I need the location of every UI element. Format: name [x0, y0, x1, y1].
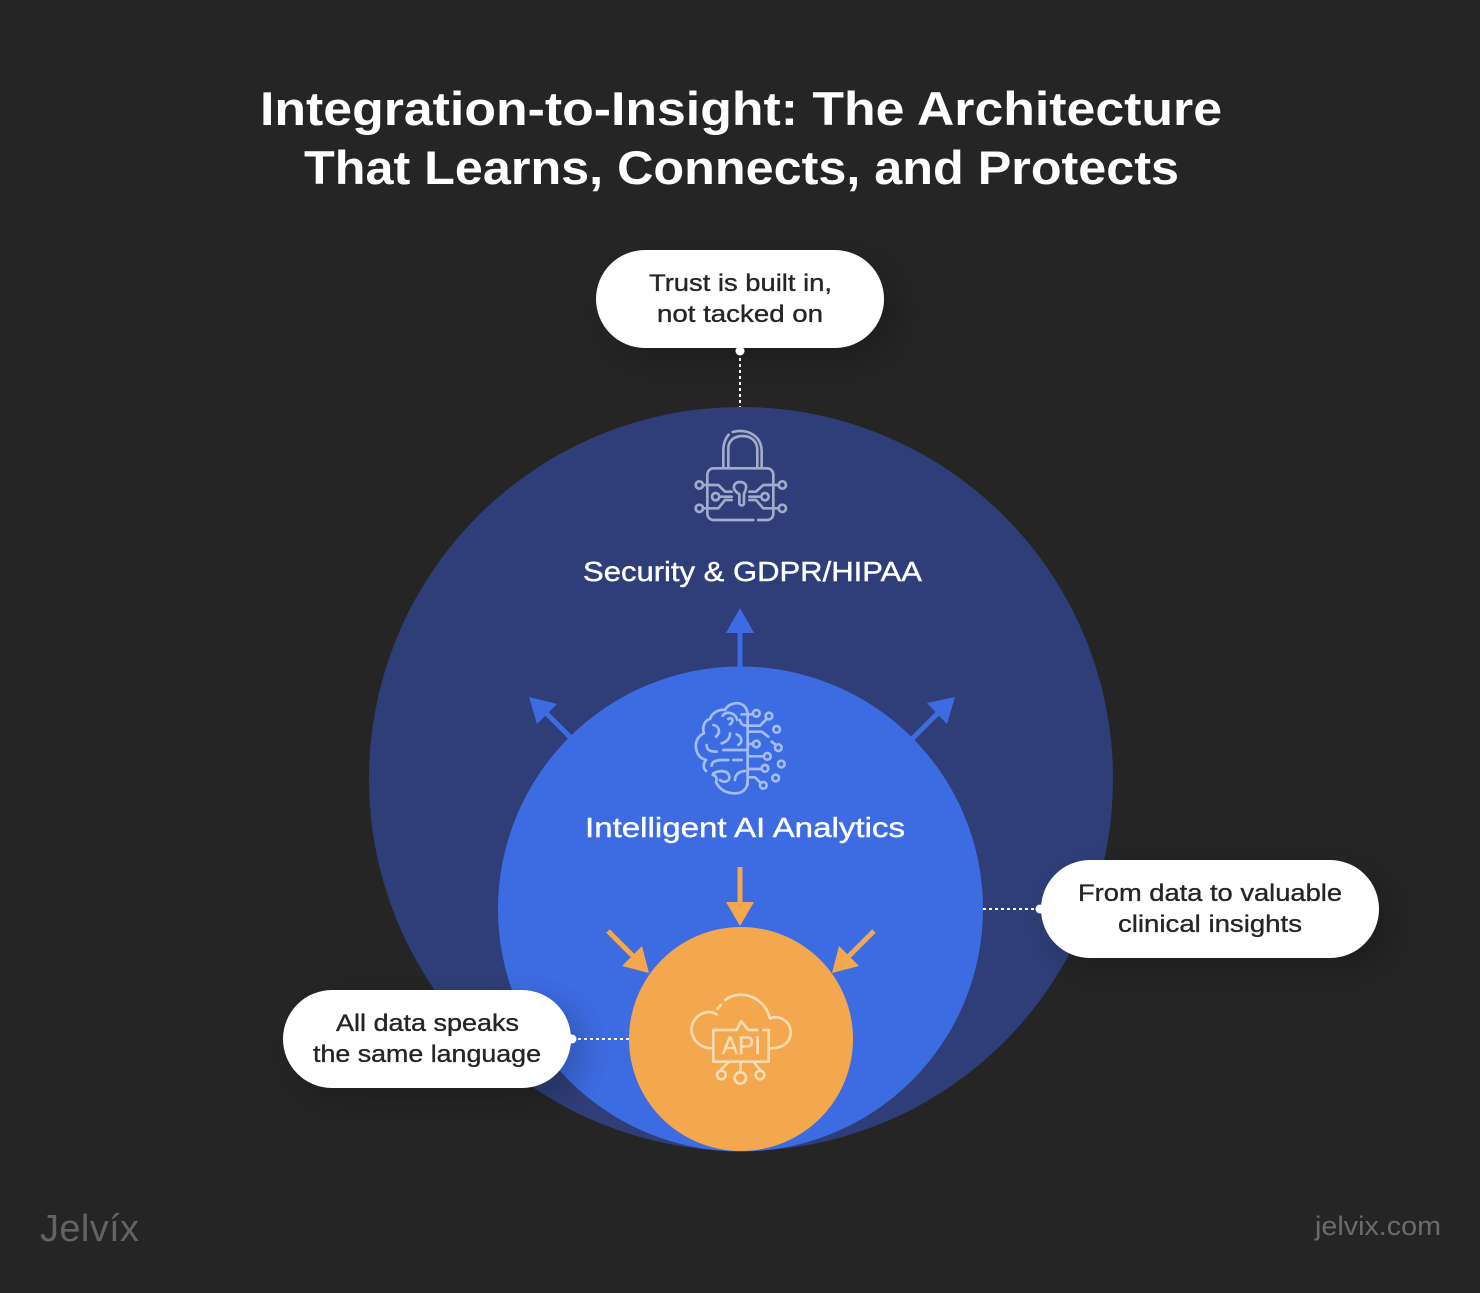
callout: insights: clinical insights — [1118, 911, 1302, 938]
callout: trust — [596, 250, 884, 356]
callout: insights — [1036, 860, 1379, 958]
callout: language — [283, 990, 576, 1088]
connector: language callout to inner circle — [572, 1038, 629, 1040]
label: security: Security & GDPR/HIPAA — [583, 556, 922, 587]
connector: insights callout to middle circle — [983, 908, 1040, 910]
logo: Jelvíx — [40, 1208, 139, 1250]
arrow: upper right — [911, 697, 955, 740]
callout: language: the same language — [313, 1041, 541, 1068]
callout: trust: Trust is built in, — [649, 270, 832, 297]
middle circle: AI analytics layer — [498, 666, 983, 1152]
arrow: lower left — [608, 931, 649, 973]
icon: API cloud: API — [722, 1032, 761, 1060]
icon: API cloud — [691, 995, 791, 1084]
outer circle: security layer — [369, 407, 1113, 1151]
website: jelvix.com — [1314, 1211, 1441, 1241]
arrow: down — [726, 867, 754, 926]
icon: brain with circuits — [696, 703, 785, 793]
title: Integration-to-Insight: The Architecture — [260, 82, 1222, 135]
callout: language: All data speaks — [336, 1010, 519, 1037]
label: AI analytics: Intelligent AI Analytics — [585, 812, 905, 843]
callout: trust: not tacked on — [657, 301, 823, 328]
inner circle: API layer — [629, 927, 853, 1151]
title — [260, 82, 1222, 194]
arrow: upper left — [529, 697, 573, 740]
arrow: lower right — [832, 931, 874, 973]
callout: insights: From data to valuable — [1078, 880, 1342, 907]
connector: trust callout to outer circle — [739, 352, 741, 407]
icon: padlock with circuits — [696, 431, 786, 520]
arrow: up — [726, 608, 754, 670]
title: That Learns, Connects, and Protects — [304, 141, 1179, 194]
